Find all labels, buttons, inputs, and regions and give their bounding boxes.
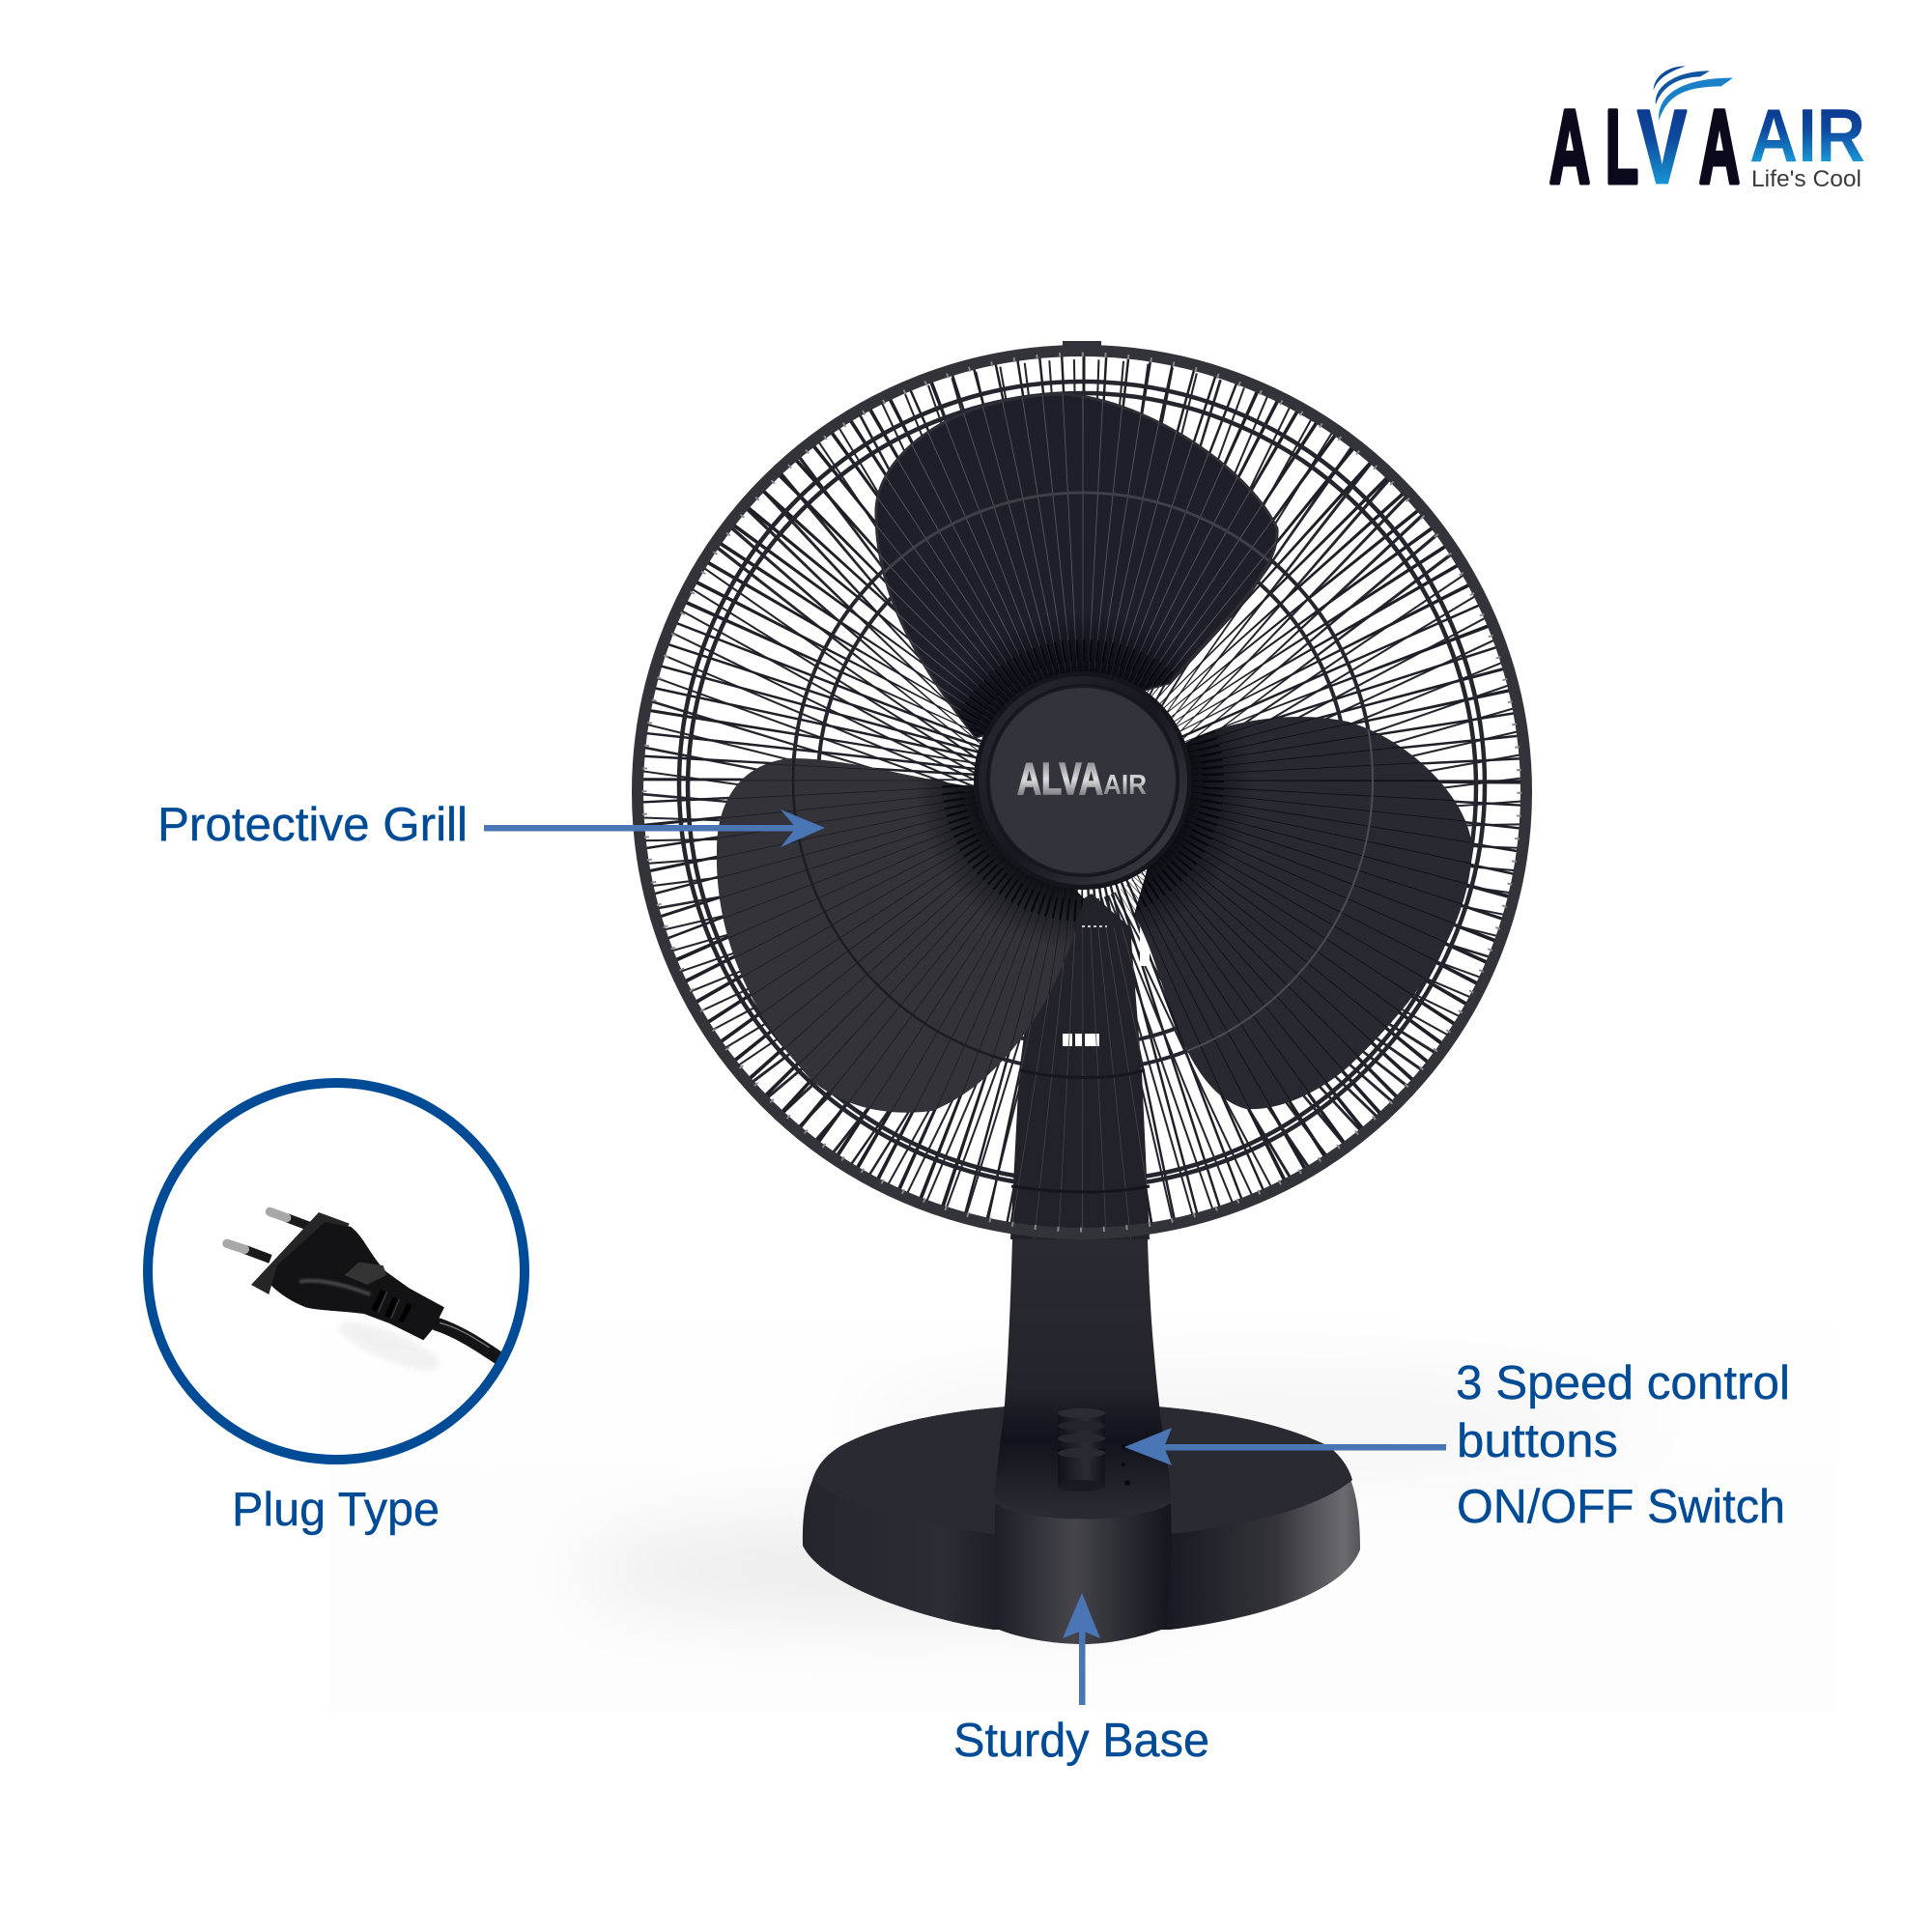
control button dots [1122, 1444, 1130, 1486]
callout: protective grill [157, 799, 825, 851]
fan motor column behind blades [1010, 894, 1150, 1239]
label: protective grill: Protective Grill [157, 799, 468, 851]
hub shadow on blades [923, 619, 1235, 935]
fan stand neck [994, 1239, 1172, 1515]
logo wordmark ALVA [1549, 88, 1740, 205]
fan blade: top [874, 392, 1279, 738]
hub logo text: ALVA [1017, 753, 1103, 804]
label: 3 speed control buttons and switch: 3 Speed control [1456, 1357, 1790, 1409]
label: sturdy base: Sturdy Base [953, 1715, 1209, 1767]
arrow: to switch [1124, 1428, 1446, 1465]
label: 3 speed control buttons and switch [1456, 1357, 1790, 1533]
arrow: to grill [484, 810, 825, 847]
logo swoosh icon [1654, 66, 1733, 121]
fan hub [974, 671, 1192, 890]
logo tagline: Life's Cool [1751, 166, 1861, 192]
callout: sturdy base [953, 1593, 1209, 1767]
plug circle ring [148, 1083, 525, 1460]
logo wordmark ALVA: L [1605, 88, 1638, 205]
plug label: Plug Type [232, 1484, 440, 1536]
logo: Alva Air [1549, 66, 1865, 205]
label: 3 speed control buttons and switch: buttons [1457, 1415, 1618, 1467]
fan front block [995, 1503, 1172, 1644]
arrow: to base [1063, 1593, 1100, 1705]
fan outer rim [638, 341, 1526, 1234]
fan blade: right [1134, 717, 1472, 1109]
hub logo text small: AIR [1103, 770, 1147, 801]
logo wordmark ALVA: A [1699, 88, 1740, 205]
fan grill wires [797, 495, 1369, 1103]
label: 3 speed control buttons and switch: ON/OFF Switch [1457, 1481, 1785, 1533]
plug type panel [148, 1083, 525, 1536]
logo wordmark ALVA: A [1549, 88, 1590, 205]
fan grill inner rings [679, 382, 1485, 1187]
fan base disk [803, 1403, 1360, 1630]
callout: speed control [1124, 1357, 1790, 1533]
floor shadow panel [329, 1285, 1836, 1712]
logo wordmark AIR: AIR [1749, 93, 1865, 178]
plug photo illustration [227, 1211, 502, 1379]
fan blade: left [717, 758, 1084, 1113]
speed control knob [1058, 1408, 1105, 1492]
fan product illustration [638, 341, 1526, 1644]
logo wordmark ALVA: V [1637, 88, 1687, 205]
